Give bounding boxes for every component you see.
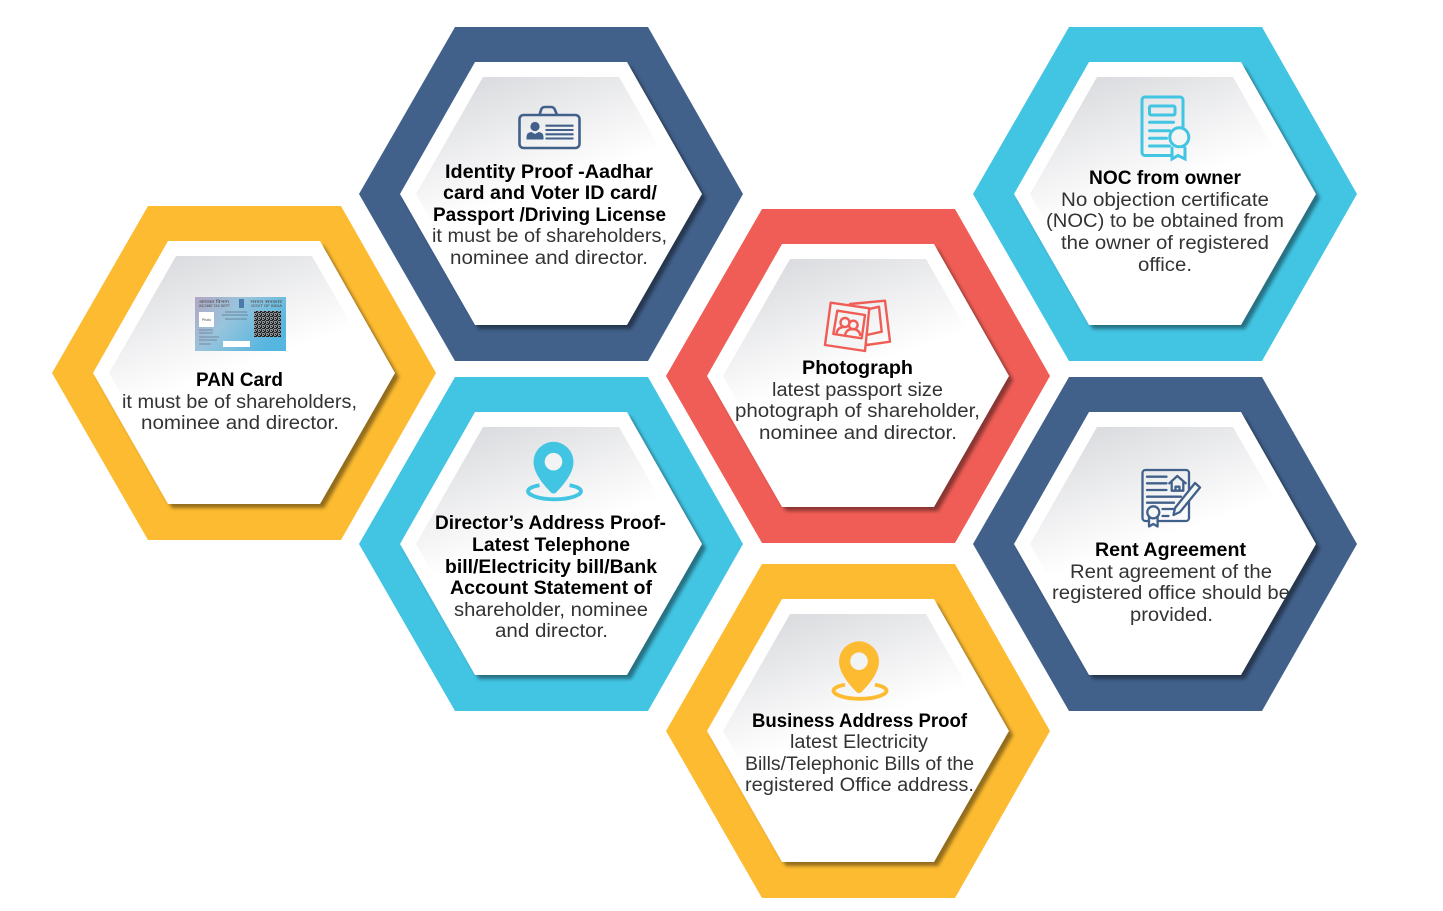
description: latest passport size [772, 380, 943, 401]
heading: card and Voter ID card/ [443, 183, 658, 204]
panel: photograph [666, 209, 1050, 543]
description: Bills/Telephonic Bills of the [745, 754, 974, 775]
heading: Director’s Address Proof- [435, 513, 666, 534]
icon: PAN card [195, 297, 286, 351]
description: nominee and director. [450, 248, 648, 269]
heading: Latest Telephone [472, 535, 630, 556]
description [735, 380, 980, 444]
description: it must be of shareholders, [432, 226, 667, 247]
heading: Business Address Proof [752, 711, 968, 732]
hexagon frame [359, 377, 743, 711]
icon: certificate [1142, 97, 1189, 159]
heading: Rent Agreement [1095, 540, 1247, 561]
description: nominee and director. [141, 413, 339, 434]
icon: PAN card: आयकर विभाग [199, 299, 230, 304]
description: registered office should be [1052, 583, 1290, 604]
heading: Identity Proof -Aadhar [445, 162, 654, 183]
description: it must be of shareholders, [122, 392, 357, 413]
icon: PAN card: भारत सरकार [250, 299, 283, 304]
description: No objection certificate [1061, 190, 1269, 211]
heading: bill/Electricity bill/Bank [445, 557, 657, 578]
description [454, 600, 648, 642]
description [1046, 190, 1284, 276]
hexagon frame [973, 27, 1357, 361]
heading: PAN Card [196, 370, 283, 391]
icon: PAN card: GOVT OF INDIA [251, 303, 282, 308]
description [432, 226, 667, 269]
description: Rent agreement of the [1070, 562, 1272, 583]
panel: PAN card [52, 206, 436, 540]
icon: agreement document [1142, 470, 1200, 526]
description: nominee and director. [759, 423, 957, 444]
hexagon frame [359, 27, 743, 361]
icon: photographs [825, 301, 890, 351]
panel: director's address proof [359, 377, 743, 711]
hexagon frame [666, 564, 1050, 898]
description: photograph of shareholder, [735, 401, 980, 422]
heading [435, 513, 666, 599]
icon: location pin [528, 442, 581, 499]
heading [433, 162, 666, 226]
icon: ID badge [520, 107, 580, 148]
heading: Passport /Driving License [433, 205, 666, 226]
hexagon frame [666, 209, 1050, 543]
description: registered Office address. [745, 775, 974, 796]
hexagon frame [52, 206, 436, 540]
panel: business address proof [666, 564, 1050, 898]
icon: location pin [834, 641, 886, 699]
description: latest Electricity [790, 732, 929, 753]
heading: Account Statement of [450, 578, 653, 599]
panel: identity proof [359, 27, 743, 361]
hexagon frame [973, 377, 1357, 711]
heading: Photograph [802, 358, 913, 379]
description: office. [1138, 255, 1192, 276]
description [745, 732, 974, 796]
description [1052, 562, 1290, 626]
panel: NOC from owner [973, 27, 1357, 361]
heading: NOC from owner [1089, 168, 1242, 189]
description: and director. [495, 621, 608, 642]
description: the owner of registered [1061, 233, 1269, 254]
description: shareholder, nominee [454, 600, 648, 621]
icon: PAN card: INCOME TAX DEPT [199, 303, 230, 308]
description [122, 392, 357, 434]
panel: rent agreement [973, 377, 1357, 711]
icon: PAN card: Photo [202, 317, 212, 322]
description: (NOC) to be obtained from [1046, 211, 1284, 232]
description: provided. [1130, 605, 1213, 626]
